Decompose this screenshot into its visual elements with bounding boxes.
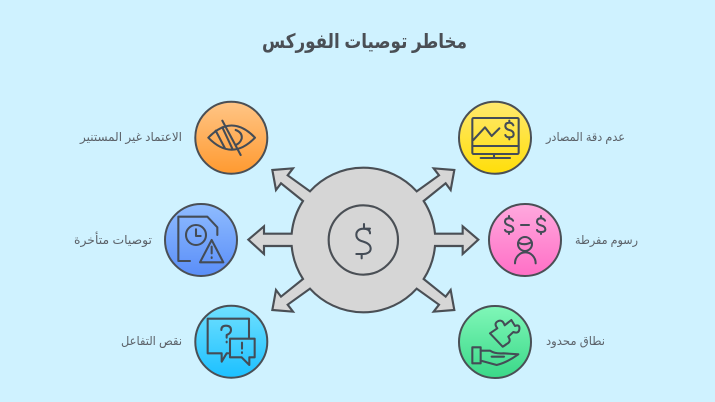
icon: central dollar (329, 205, 398, 275)
label: الاعتماد غير المستنير (79, 130, 182, 145)
panel: excessive fees (489, 204, 638, 276)
panel: uninformed reliance (79, 102, 267, 174)
icon: chat bubbles (208, 319, 255, 365)
icon: monitor chart (472, 118, 519, 158)
icon: crossed eye (208, 121, 255, 155)
label: نقص التفاعل (121, 334, 182, 349)
panel: limited scope (459, 306, 605, 378)
icon: document clock warning (178, 217, 223, 262)
label: توصيات متأخرة (74, 231, 152, 248)
panel: lack of interaction (121, 306, 267, 378)
icon: person with dollars (505, 216, 545, 263)
panel: late recommendations (74, 204, 237, 276)
label: رسوم مفرطة (575, 233, 638, 248)
panel: inaccurate sources (459, 102, 625, 174)
title: مخاطر توصيات الفوركس (262, 31, 467, 53)
label: عدم دقة المصادر (545, 130, 625, 145)
label: نطاق محدود (546, 334, 605, 349)
icon: hand with puzzle piece (472, 320, 519, 365)
central hub with six arrows (248, 168, 478, 312)
